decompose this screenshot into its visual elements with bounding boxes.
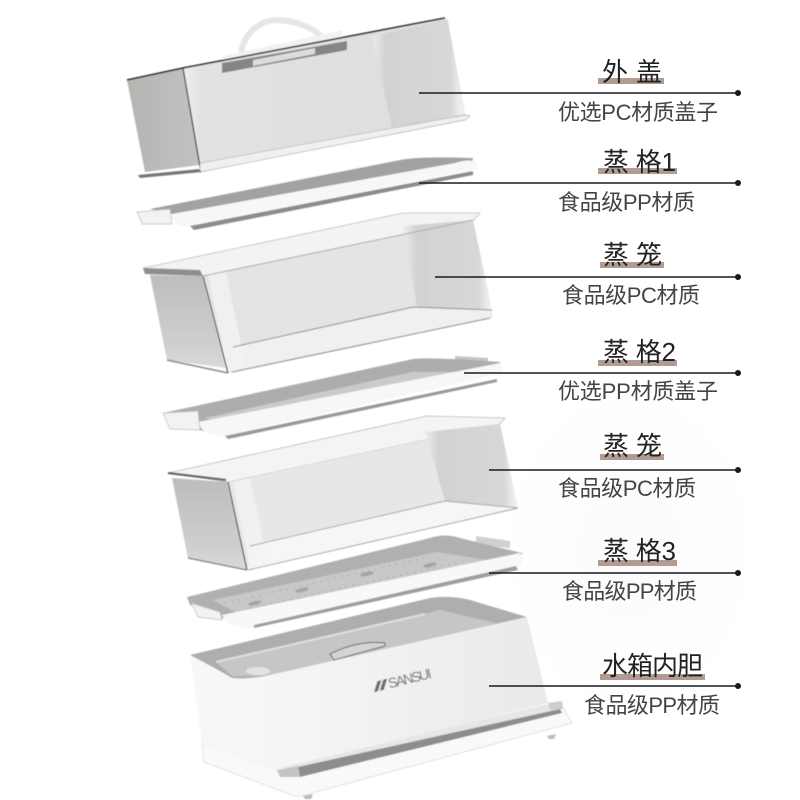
lid handle bbox=[241, 20, 322, 52]
lid rim bbox=[200, 115, 470, 172]
basket 1 right tinted section bbox=[403, 220, 492, 310]
steam tray 2 bbox=[163, 356, 502, 439]
steamer basket 2 bbox=[168, 416, 518, 570]
lid front face bbox=[183, 18, 465, 168]
basket 2 rim bbox=[168, 416, 505, 482]
SANSUI brand: SANSUI bbox=[386, 665, 433, 691]
label: steamer basket 1 bbox=[435, 240, 741, 308]
water tank base bbox=[190, 597, 572, 799]
tray 3 perforated floor bbox=[213, 552, 487, 613]
label: outer lid: 优选PC材质盖子 bbox=[558, 100, 718, 125]
label: steam tray 1: 蒸 格1 bbox=[603, 147, 676, 177]
basket 1 left face bbox=[150, 275, 226, 368]
label: steam tray 2 bbox=[464, 337, 741, 404]
exploded product: lid bbox=[127, 18, 470, 178]
tank body bbox=[190, 617, 548, 772]
control panel strip bbox=[280, 704, 556, 768]
label: steam tray 3: 蒸 格3 bbox=[603, 536, 676, 566]
tank feet bbox=[303, 734, 556, 799]
basket 1 rim bbox=[143, 213, 480, 276]
label: steamer basket 1: 食品级PC材质 bbox=[562, 283, 700, 308]
basket 2 right tinted section bbox=[425, 424, 518, 508]
steam tray 3 bbox=[187, 536, 523, 628]
label: outer lid: 外 盖 bbox=[602, 57, 662, 87]
steam tray 1 bbox=[137, 155, 478, 230]
steamer basket 1 bbox=[143, 213, 492, 373]
label: water tank liner: 食品级PP材质 bbox=[584, 693, 720, 718]
lid right tinted section bbox=[372, 20, 464, 128]
label: steam tray 1: 食品级PP材质 bbox=[558, 190, 695, 215]
label: water tank liner bbox=[489, 651, 741, 718]
basket 2 front face bbox=[228, 424, 518, 570]
tank inner knob bbox=[246, 667, 270, 675]
lid latch bbox=[222, 41, 347, 73]
tank inner hub bbox=[330, 642, 385, 660]
label: outer lid bbox=[419, 57, 741, 125]
basket 1 front face bbox=[202, 220, 492, 373]
label: steam tray 2: 优选PP材质盖子 bbox=[558, 379, 718, 404]
label: steamer basket 1: 蒸 笼 bbox=[603, 240, 662, 270]
label: steamer basket 2 bbox=[489, 431, 741, 501]
label: steam tray 3: 食品级PP材质 bbox=[562, 579, 697, 604]
lid left side face bbox=[127, 68, 200, 172]
base plate bbox=[202, 702, 572, 797]
label: steam tray 2: 蒸 格2 bbox=[603, 337, 676, 367]
label: steam tray 1 bbox=[419, 147, 741, 215]
label: water tank liner: 水箱内胆 bbox=[602, 651, 703, 681]
label: steamer basket 2: 食品级PC材质 bbox=[558, 476, 696, 501]
tank interior bbox=[190, 597, 527, 680]
label: steamer basket 2: 蒸 笼 bbox=[603, 431, 662, 461]
label: steam tray 3 bbox=[489, 536, 741, 604]
basket 2 left face bbox=[172, 478, 247, 570]
SANSUI brand bbox=[371, 665, 433, 695]
